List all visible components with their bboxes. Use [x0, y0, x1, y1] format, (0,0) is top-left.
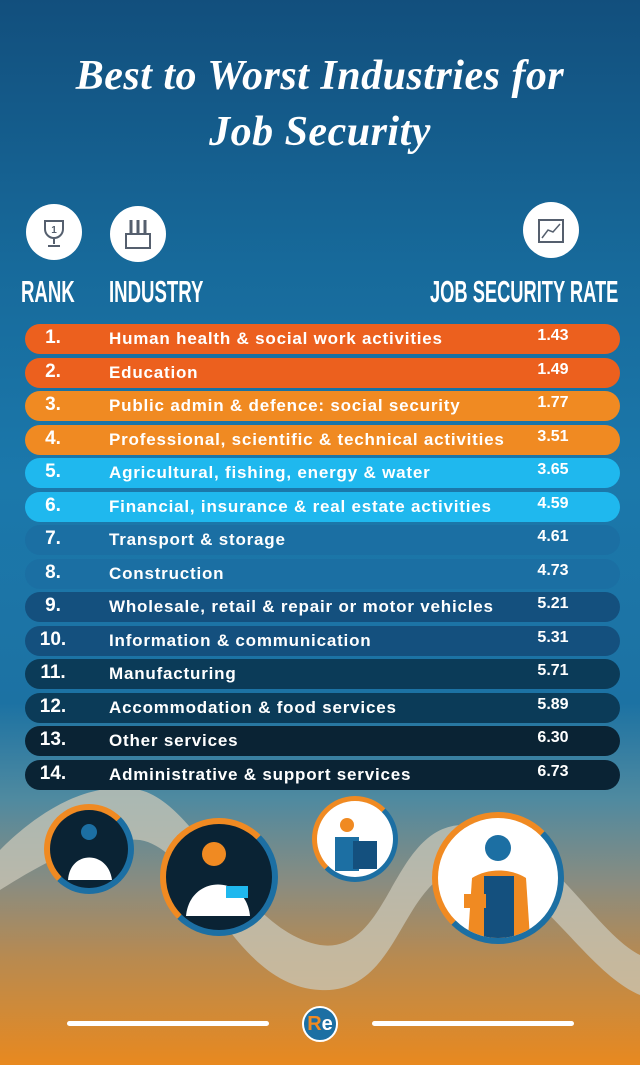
- row 13: [25, 726, 620, 756]
- row 11: [25, 659, 620, 689]
- row 9: 5.21: [537, 595, 569, 612]
- row 13: 13.: [40, 729, 66, 750]
- row 2: Education: [109, 362, 198, 382]
- row 3: [25, 391, 620, 421]
- row 14: Administrative & support services: [109, 764, 411, 784]
- row 9: [25, 592, 620, 622]
- header: rank: RANK: [21, 274, 75, 309]
- row 7: 7.: [45, 528, 61, 549]
- row 10: 10.: [40, 628, 66, 650]
- row 3: Public admin & defence: social security: [109, 396, 460, 415]
- row 8: 8.: [45, 562, 61, 582]
- row 5: Agricultural, fishing, energy & water: [109, 463, 430, 482]
- footer line left: [67, 1021, 269, 1026]
- background hills: [0, 790, 640, 995]
- title: Best to Worst Industries for: [76, 53, 564, 99]
- row 13: Other services: [109, 731, 238, 750]
- row 11: 5.71: [537, 662, 569, 679]
- row 14: 14.: [40, 762, 66, 784]
- row 11: Manufacturing: [109, 664, 237, 683]
- row 2: 1.49: [537, 360, 569, 378]
- illustration: doctor: [44, 804, 134, 894]
- row 9: 9.: [45, 595, 61, 616]
- logo: Re: [307, 1013, 333, 1035]
- row 1: 1.: [45, 327, 61, 348]
- row 12: 12.: [40, 696, 66, 716]
- row 12: Accommodation & food services: [109, 698, 397, 716]
- row 10: 5.31: [537, 628, 569, 646]
- header: industry: INDUSTRY: [109, 274, 203, 309]
- row 4: Professional, scientific & technical activities: [109, 430, 505, 448]
- row 6: Financial, insurance & real estate activities: [109, 496, 492, 516]
- row 8: [25, 558, 620, 588]
- row 1: 1.43: [537, 327, 569, 344]
- row 2: [25, 358, 620, 388]
- row 14: 6.73: [537, 762, 569, 780]
- logo: [302, 1006, 338, 1042]
- row 8: 4.73: [537, 562, 569, 578]
- row 8: Construction: [109, 564, 224, 582]
- row 5: 3.65: [537, 461, 569, 478]
- row 1: [25, 324, 620, 354]
- row 12: [25, 692, 620, 722]
- row 5: 5.: [45, 461, 61, 482]
- icon: factory: [110, 206, 166, 262]
- row 12: 5.89: [537, 696, 569, 712]
- illustration: delivery worker: [312, 796, 398, 882]
- title: Job Security: [209, 109, 431, 155]
- row 3: 1.77: [537, 394, 569, 411]
- icon: chart: [523, 202, 579, 258]
- icon: trophy: 1: [51, 225, 57, 236]
- row 2: 2.: [45, 360, 61, 382]
- table rows: [25, 324, 620, 790]
- row 14: [25, 760, 620, 790]
- row 13: 6.30: [537, 729, 569, 746]
- row 4: [25, 424, 620, 454]
- icon: trophy: [26, 204, 82, 260]
- row 6: 6.: [45, 494, 61, 516]
- row 11: 11.: [40, 662, 66, 683]
- illustration: teacher: [160, 818, 278, 936]
- illustration: retail worker: [432, 812, 564, 944]
- row 10: [25, 626, 620, 656]
- row 7: Transport & storage: [109, 530, 286, 549]
- row 1: Human health & social work activities: [109, 329, 443, 348]
- row 5: [25, 458, 620, 488]
- row 4: 3.51: [537, 428, 569, 444]
- footer line right: [372, 1021, 574, 1026]
- title: [75, 53, 564, 155]
- row 4: 4.: [45, 428, 61, 448]
- row 6: [25, 492, 620, 522]
- row 7: [25, 525, 620, 555]
- row 7: 4.61: [537, 528, 569, 545]
- row 6: 4.59: [537, 494, 569, 512]
- row 9: Wholesale, retail & repair or motor vehicles: [109, 597, 494, 616]
- header: job security rate: JOB SECURITY RATE: [430, 274, 618, 309]
- row 3: 3.: [45, 394, 61, 415]
- row 10: Information & communication: [109, 630, 371, 650]
